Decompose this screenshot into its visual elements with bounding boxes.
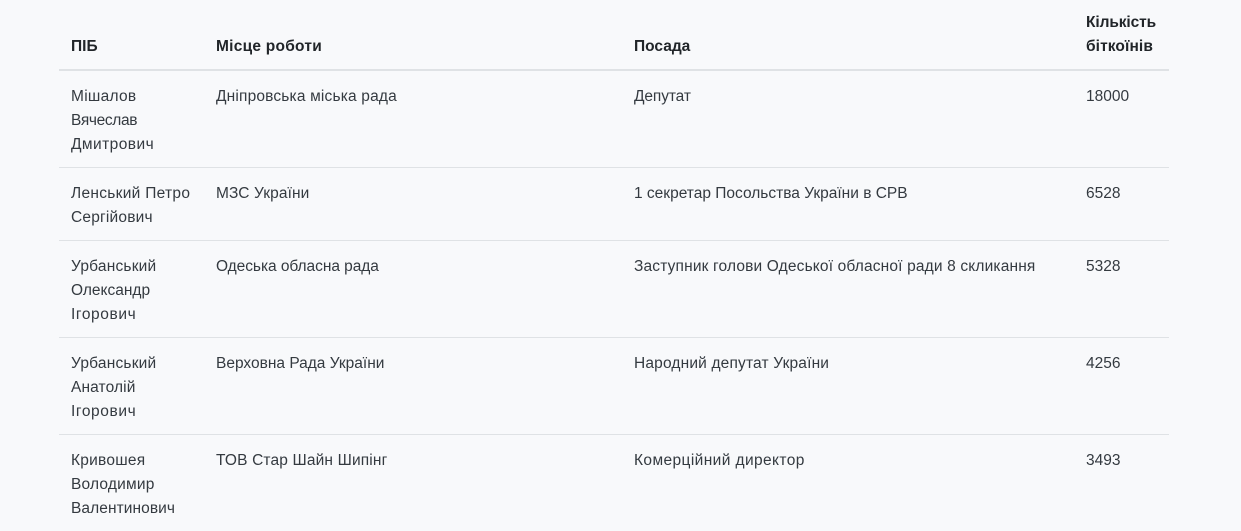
position: Депутат <box>634 88 691 105</box>
name: Сергійович <box>71 209 153 226</box>
workplace: МЗС України <box>216 185 309 202</box>
name: Вячеслав <box>71 112 137 129</box>
name <box>71 258 156 323</box>
workplace: Дніпровська міська рада <box>216 88 397 105</box>
name: Анатолій <box>71 379 136 396</box>
workplace: Верховна Рада України <box>216 355 384 372</box>
table header row <box>59 14 1169 71</box>
header: bitcoin count: Кількість <box>1086 14 1156 31</box>
workplace: Одеська обласна рада <box>216 258 379 275</box>
bitcoin count: 3493 <box>1086 452 1120 469</box>
row 5 <box>71 452 1120 517</box>
bitcoin count: 6528 <box>1086 185 1120 202</box>
name <box>71 355 156 420</box>
row 3 <box>59 258 1169 338</box>
name <box>71 452 175 517</box>
bitcoin count: 18000 <box>1086 88 1129 105</box>
bitcoin count: 4256 <box>1086 355 1120 372</box>
name: Ігорович <box>71 306 136 323</box>
name: Ленський Петро <box>71 185 190 202</box>
name: Мішалов <box>71 88 136 105</box>
name: Ігорович <box>71 403 136 420</box>
header: position: Посада <box>634 38 690 55</box>
position: Заступник голови Одеської обласної ради 8 скликання <box>634 258 1036 275</box>
name: Урбанський <box>71 258 156 275</box>
row 4 <box>59 355 1169 435</box>
header: bitcoin count: біткоїнів <box>1086 38 1153 55</box>
name: Олександр <box>71 282 150 299</box>
name: Володимир <box>71 476 155 493</box>
row 1 <box>59 88 1169 168</box>
position: Народний депутат України <box>634 355 829 372</box>
header: name: ПІБ <box>71 38 98 55</box>
workplace: ТОВ Стар Шайн Шипінг <box>216 452 387 469</box>
name: Дмитрович <box>71 136 154 153</box>
name: Урбанський <box>71 355 156 372</box>
header rule <box>59 69 1169 71</box>
position: Комерційний директор <box>634 452 805 469</box>
bitcoin count: 5328 <box>1086 258 1120 275</box>
position: 1 секретар Посольства України в СРВ <box>634 185 908 202</box>
row rule <box>59 167 1169 168</box>
row rule <box>59 337 1169 338</box>
row 2 <box>59 185 1169 241</box>
row rule <box>59 434 1169 435</box>
name: Валентинович <box>71 500 175 517</box>
row rule <box>59 240 1169 241</box>
name <box>71 88 154 153</box>
header: bitcoin count <box>1086 14 1156 55</box>
name <box>71 185 190 226</box>
header: workplace: Місце роботи <box>216 38 322 55</box>
name: Кривошея <box>71 452 145 469</box>
